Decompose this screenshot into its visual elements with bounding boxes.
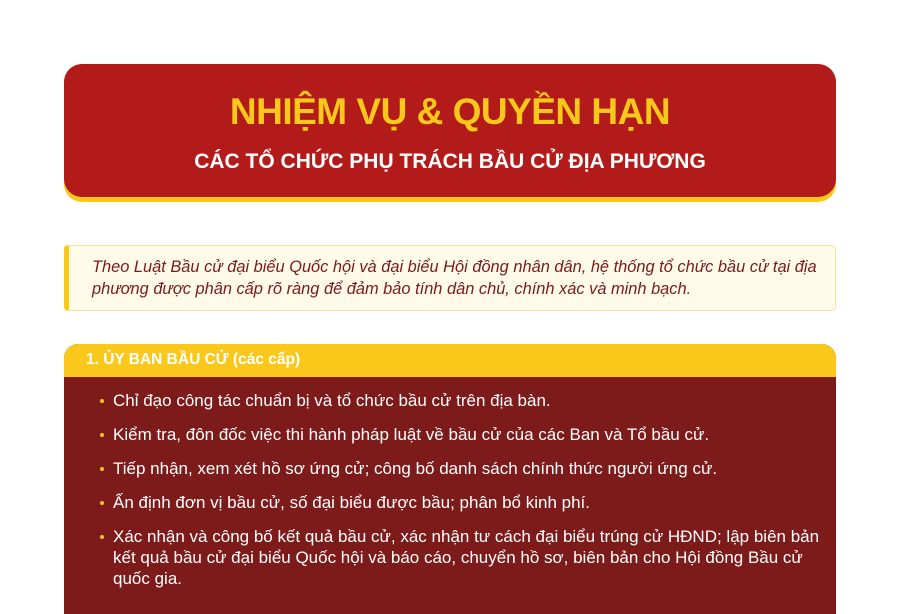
- bullet list: [100, 391, 819, 588]
- bullet list: quốc gia.: [113, 569, 182, 588]
- bullet list: Kiểm tra, đôn đốc việc thi hành pháp luật về bầu cử của các Ban và Tổ bầu cử.: [113, 425, 709, 444]
- intro callout: Theo Luật Bầu cử đại biểu Quốc hội và đại biểu Hội đồng nhân dân, hệ thống tổ chức bầu cử tại địa: [92, 258, 817, 276]
- panel heading: [64, 344, 836, 377]
- bullet list: Chỉ đạo công tác chuẩn bị và tổ chức bầu cử trên địa bàn.: [113, 391, 551, 410]
- header banner: [64, 64, 836, 202]
- intro callout: phương được phân cấp rõ ràng để đảm bảo tính dân chủ, chính xác và minh bạch.: [92, 280, 691, 298]
- title: NHIỆM VỤ & QUYỀN HẠN: [230, 91, 670, 132]
- bullet list: Xác nhận và công bố kết quả bầu cử, xác nhận tư cách đại biểu trúng cử HĐND; lập biên bản: [113, 527, 819, 546]
- panel: uy ban bau cu: [64, 344, 836, 614]
- intro callout: [64, 245, 836, 311]
- panel heading: 1. ỦY BAN BẦU CỬ (các cấp): [86, 351, 300, 368]
- subtitle: CÁC TỔ CHỨC PHỤ TRÁCH BẦU CỬ ĐỊA PHƯƠNG: [194, 150, 706, 173]
- bullet list: kết quả bầu cử đại biểu Quốc hội và báo cáo, chuyển hồ sơ, biên bản cho Hội đồng Bầu cử: [113, 548, 803, 567]
- bullet list: Tiếp nhận, xem xét hồ sơ ứng cử; công bố danh sách chính thức người ứng cử.: [113, 459, 717, 478]
- bullet list: Ấn định đơn vị bầu cử, số đại biểu được bầu; phân bổ kinh phí.: [113, 493, 590, 512]
